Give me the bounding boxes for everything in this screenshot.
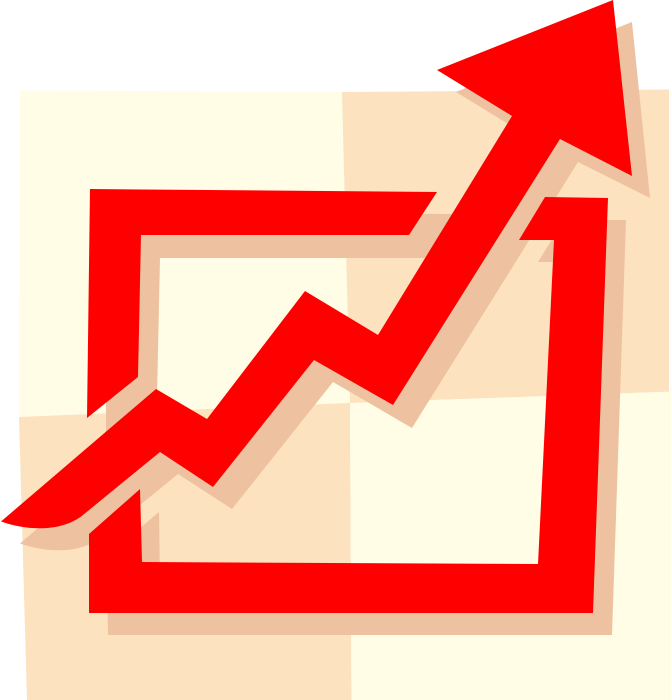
frame right and bottom bbox=[89, 197, 608, 613]
shadow: frame top-left bbox=[106, 212, 456, 440]
panel: top-right tan square bbox=[342, 90, 669, 403]
panel: top-left cream square bbox=[19, 90, 350, 417]
panel: bottom-right cream square bbox=[350, 392, 671, 700]
arrow bbox=[1, 0, 632, 528]
panel: bottom-left tan square bbox=[19, 403, 352, 700]
shadow: frame right and bottom bbox=[107, 220, 626, 635]
shadow: arrow bbox=[20, 22, 650, 550]
frame top-left bbox=[87, 189, 437, 418]
